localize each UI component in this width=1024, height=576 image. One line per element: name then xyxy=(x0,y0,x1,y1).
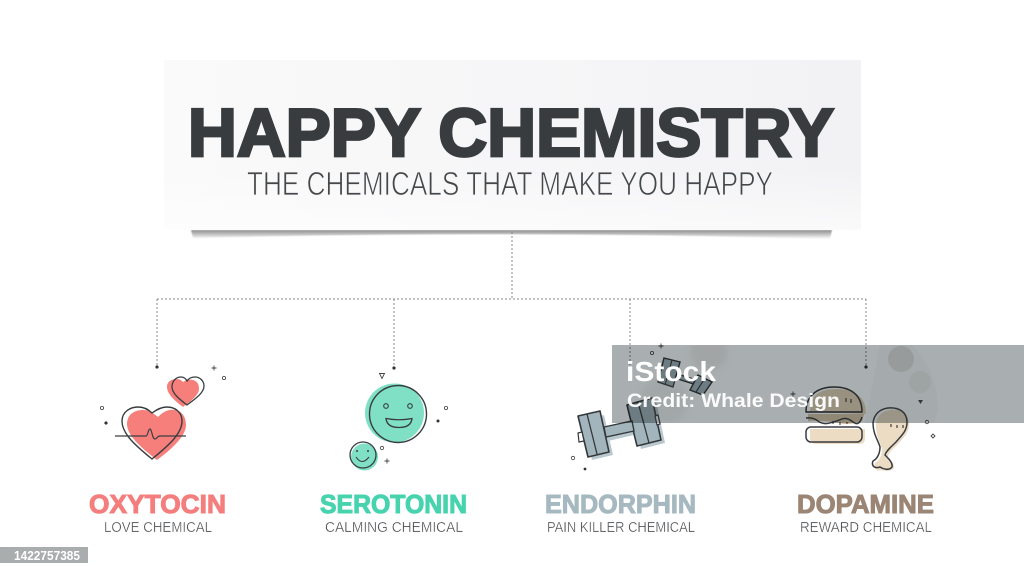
title: HAPPY CHEMISTRY xyxy=(188,95,834,171)
label: oxytocin: OXYTOCIN xyxy=(89,489,226,519)
icon: burger and drumstick xyxy=(790,387,935,471)
label: dopamine xyxy=(797,489,934,536)
label: serotonin: SEROTONIN xyxy=(320,489,467,519)
icon: smiley faces xyxy=(350,374,448,470)
connector lines xyxy=(155,232,868,370)
label: serotonin xyxy=(320,489,467,536)
label: serotonin: CALMING CHEMICAL xyxy=(325,519,463,536)
label: endorphin xyxy=(545,489,696,536)
label: oxytocin xyxy=(89,489,226,536)
image id tag: 1422757385 xyxy=(14,549,80,563)
label: endorphin: PAIN KILLER CHEMICAL xyxy=(547,519,695,536)
watermark text: iStock xyxy=(626,356,716,387)
subtitle: THE CHEMICALS THAT MAKE YOU HAPPY xyxy=(247,165,773,202)
watermark banner xyxy=(612,345,1024,423)
image id tag xyxy=(0,547,88,563)
icon: dumbbells xyxy=(571,344,712,470)
title panel xyxy=(164,60,861,239)
label: oxytocin: LOVE CHEMICAL xyxy=(104,519,212,536)
watermark banner: Credit: Whale Design xyxy=(627,391,840,412)
label: endorphin: ENDORPHIN xyxy=(545,489,696,519)
icon: hearts xyxy=(100,366,226,460)
label: dopamine: REWARD CHEMICAL xyxy=(800,519,932,536)
label: dopamine: DOPAMINE xyxy=(797,489,934,519)
